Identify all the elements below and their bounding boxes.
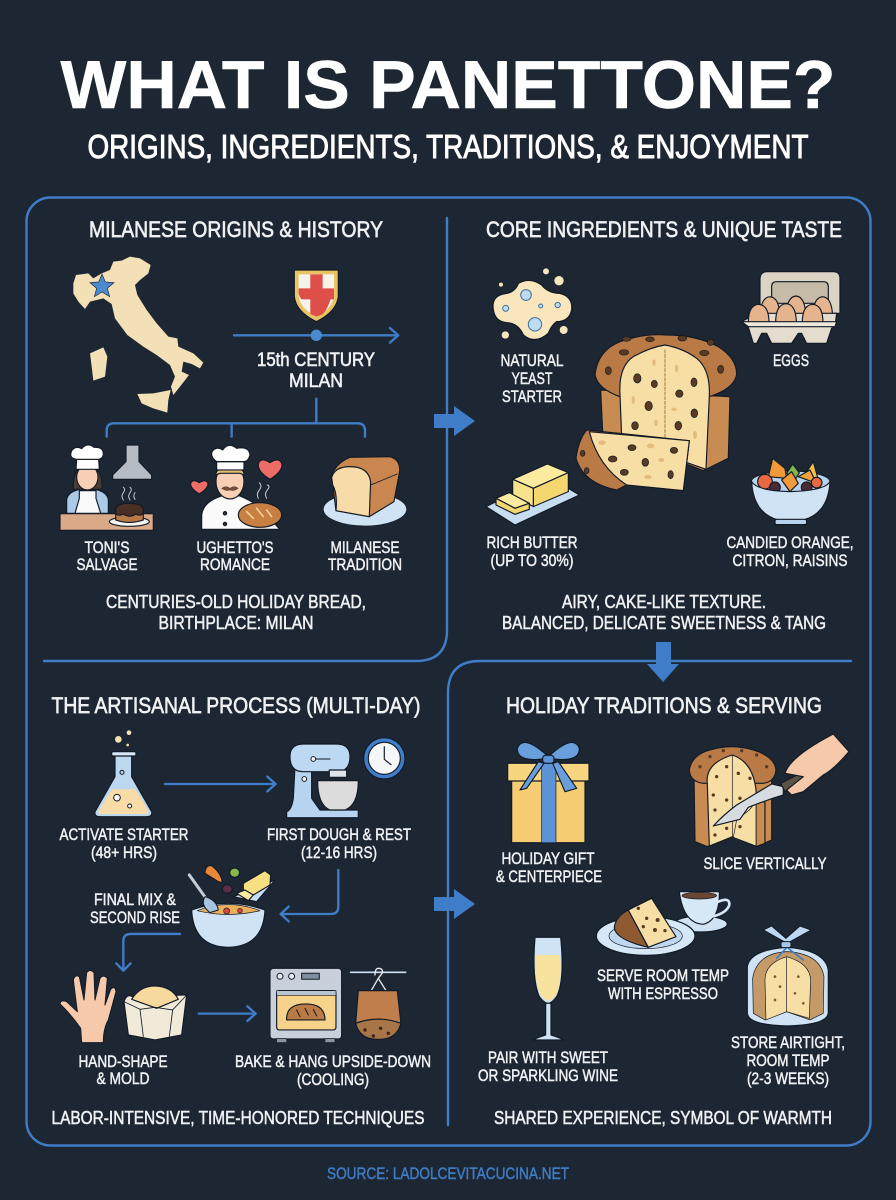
label: Ughetto's romance: UGHETTO'S <box>196 538 274 557</box>
icon: Milan shield <box>294 270 338 322</box>
icon: sliced panettone <box>576 335 737 491</box>
label: natural yeast starter <box>500 351 564 406</box>
icon: bowl of candied fruit <box>751 458 830 525</box>
label: Ughetto's romance: ROMANCE <box>200 555 270 574</box>
label: holiday gift: HOLIDAY GIFT <box>502 849 594 868</box>
caption: process summary: LABOR-INTENSIVE, TIME-HONORED TECHNIQUES <box>52 1108 424 1128</box>
icon: Milanese bread loaf <box>323 457 407 526</box>
icon: Ughetto the baker with hearts <box>191 445 282 529</box>
icon: butter on dish <box>486 464 579 525</box>
icon: Toni with cake <box>60 445 153 530</box>
label: bake and hang <box>235 1052 431 1089</box>
arrow: first dough to final mix <box>281 870 338 921</box>
label: serve room temp: SERVE ROOM TEMP <box>597 966 729 985</box>
label: bake and hang: (COOLING) <box>297 1070 369 1089</box>
label: pair with wine <box>478 1048 618 1085</box>
label: natural yeast starter: YEAST <box>512 369 552 388</box>
heading: traditions: HOLIDAY TRADITIONS & SERVING <box>506 693 822 718</box>
outer frame and quadrant dividers <box>26 198 870 1146</box>
caption: origins summary <box>106 592 366 633</box>
label: rich butter: RICH BUTTER <box>486 533 578 552</box>
heading: origins: MILANESE ORIGINS & HISTORY <box>89 217 383 242</box>
label: Milanese tradition: MILANESE <box>330 538 400 557</box>
caption: texture and taste: BALANCED, DELICATE SWEETNESS & TANG <box>502 613 826 633</box>
label: natural yeast starter: STARTER <box>502 387 562 406</box>
arrow: final mix to shaping <box>116 934 180 971</box>
label: 15th century Milan: 15th CENTURY <box>257 350 375 371</box>
arrow: origins to ingredients <box>434 406 475 436</box>
label: rich butter: (UP TO 30%) <box>490 551 574 570</box>
icon: map of Italy with star on Milan <box>73 257 203 413</box>
label: first dough and rest: (12-16 HRS) <box>301 843 377 862</box>
heading: ingredients: CORE INGREDIENTS & UNIQUE TASTE <box>486 217 842 242</box>
panel: core ingredients and unique taste <box>486 217 854 633</box>
label: natural yeast starter: NATURAL <box>500 351 564 370</box>
icon: panettone hanging upside-down <box>351 968 406 1039</box>
icon: plated slice with espresso <box>596 892 729 955</box>
caption: origins summary: BIRTHPLACE: MILAN <box>158 613 314 633</box>
icon: sparkling wine flute <box>533 937 564 1040</box>
icon: hand and paper mold <box>60 970 187 1043</box>
icon: gift box with blue bow <box>508 742 589 843</box>
arrow: ingredients to traditions <box>647 642 679 682</box>
timeline arrow <box>234 328 398 343</box>
label: holiday gift <box>496 849 602 886</box>
panel: artisanal process <box>52 693 431 1128</box>
icon: natural yeast starter <box>493 268 572 340</box>
icon: flask with starter <box>95 730 152 817</box>
icon: panettone in airtight bag <box>747 926 828 1026</box>
label: candied fruit: CITRON, RAISINS <box>732 551 848 570</box>
icon: oven with bread <box>270 968 342 1043</box>
label: activate starter: ACTIVATE STARTER <box>60 825 188 844</box>
label: Toni's salvage <box>76 538 138 574</box>
label: first dough and rest: FIRST DOUGH & REST <box>267 825 411 844</box>
arrow: shaping to oven <box>199 1006 256 1021</box>
label: pair with wine: PAIR WITH SWEET <box>488 1048 608 1067</box>
arrow: process to traditions <box>434 889 475 919</box>
icon: slicing panettone with knife <box>689 734 849 847</box>
arrow: starter to first dough <box>165 777 276 791</box>
label: hand-shape and mold: & MOLD <box>96 1069 150 1088</box>
label: pair with wine: OR SPARKLING WINE <box>478 1066 618 1085</box>
label: candied fruit: CANDIED ORANGE, <box>726 533 854 552</box>
title: WHAT IS PANETTONE? <box>60 47 836 123</box>
label: bake and hang: BAKE & HANG UPSIDE-DOWN <box>235 1052 431 1071</box>
label: final mix and second rise: SECOND RISE <box>90 908 180 927</box>
label: serve room temp <box>597 966 729 1003</box>
label: final mix and second rise: FINAL MIX & <box>94 890 177 909</box>
label: final mix and second rise <box>90 890 180 927</box>
label: activate starter <box>60 825 188 862</box>
label: 15th century Milan: MILAN <box>289 371 343 392</box>
label: Toni's salvage: SALVAGE <box>76 555 138 574</box>
label: store airtight: STORE AIRTIGHT, <box>731 1033 845 1052</box>
caption: texture and taste: AIRY, CAKE-LIKE TEXTURE. <box>562 592 766 612</box>
label: holiday gift: & CENTERPIECE <box>496 867 602 886</box>
label: Toni's salvage: TONI'S <box>84 538 130 557</box>
label: activate starter: (48+ HRS) <box>91 843 157 862</box>
label: 15th century Milan <box>257 350 375 392</box>
label: candied fruit <box>726 533 854 570</box>
label: hand-shape and mold <box>78 1052 168 1088</box>
label: store airtight: (2-3 WEEKS) <box>747 1069 829 1088</box>
label: rich butter <box>486 533 578 570</box>
label: Ughetto's romance <box>196 538 274 574</box>
caption: texture and taste <box>502 592 826 633</box>
source line: SOURCE: LADOLCEVITACUCINA.NET <box>327 1165 569 1183</box>
label: first dough and rest <box>267 825 411 862</box>
icon: stand mixer and clock <box>287 738 405 818</box>
label: store airtight: ROOM TEMP <box>746 1051 830 1070</box>
label: Milanese tradition <box>328 538 402 574</box>
label: hand-shape and mold: HAND-SHAPE <box>78 1052 168 1071</box>
panel: Milanese origins and history <box>60 217 407 633</box>
label: serve room temp: WITH ESPRESSO <box>608 984 718 1003</box>
branching connector <box>107 399 365 437</box>
label: store airtight <box>731 1033 845 1088</box>
label: Milanese tradition: TRADITION <box>328 555 402 574</box>
icon: mixing bowl with ingredients <box>189 866 275 947</box>
label: eggs: EGGS <box>773 351 809 370</box>
icon: egg carton <box>742 272 840 343</box>
caption: origins summary: CENTURIES-OLD HOLIDAY BREAD, <box>106 592 366 612</box>
label: slice vertically: SLICE VERTICALLY <box>704 854 826 873</box>
panel: holiday traditions and serving <box>478 693 849 1128</box>
caption: traditions summary: SHARED EXPERIENCE, SYMBOL OF WARMTH <box>494 1108 832 1128</box>
heading: process: THE ARTISANAL PROCESS (MULTI-DAY) <box>52 693 420 718</box>
